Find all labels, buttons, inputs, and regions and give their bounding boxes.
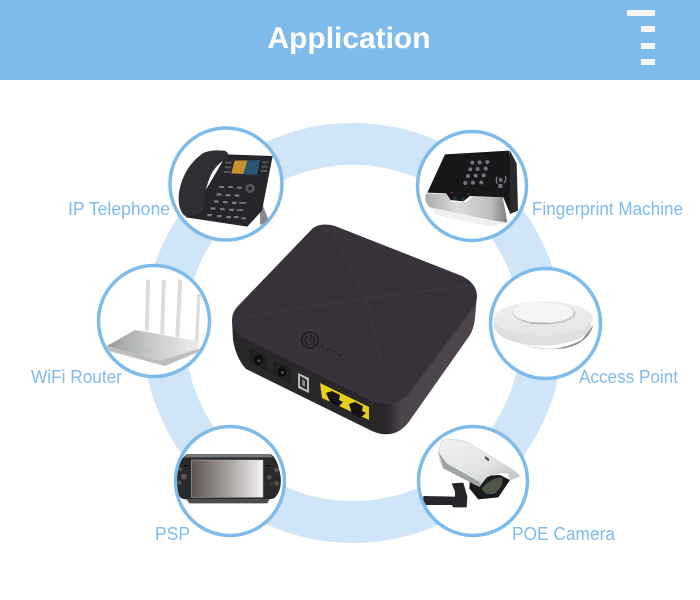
yellow RJ45 ports [320,383,369,420]
title: Application [268,22,430,55]
icon: desk phone [179,150,273,227]
icon: security camera [423,439,520,507]
circle badge [418,426,528,536]
DC jack 1 [250,349,266,369]
device top face [232,225,477,404]
label: Fingerprint Machine [532,199,683,219]
circle badge [490,268,600,378]
label: IP Telephone [68,199,170,219]
panel: Fingerprint Machine [418,132,683,240]
device top creases [240,232,470,398]
background ring [164,144,542,522]
central device: PoE UPS [232,225,477,434]
circle badge [418,132,526,240]
icon: handheld console [177,454,281,503]
panel: WiFi Router [31,266,210,387]
panel: Access Point [490,268,678,387]
DC jack 2 [274,361,290,382]
icon: fingerprint reader [425,151,518,227]
label: POE Camera [512,524,616,544]
icon: router [107,279,201,366]
USB port [298,373,309,393]
header banner [0,0,700,80]
label: WiFi Router [31,367,122,387]
circle badge [170,128,282,240]
label: PSP [155,524,190,544]
panel: POE Camera [418,426,616,544]
icon: ceiling access point [494,301,593,349]
icon: header menu bars [627,10,655,65]
panel: IP Telephone [68,128,282,240]
label: Access Point [579,367,678,387]
device side walls [232,295,477,434]
circle badge [98,266,210,376]
circle badge [176,426,284,536]
status dots [321,345,341,356]
power button [302,332,318,348]
panel: PSP [155,426,284,544]
